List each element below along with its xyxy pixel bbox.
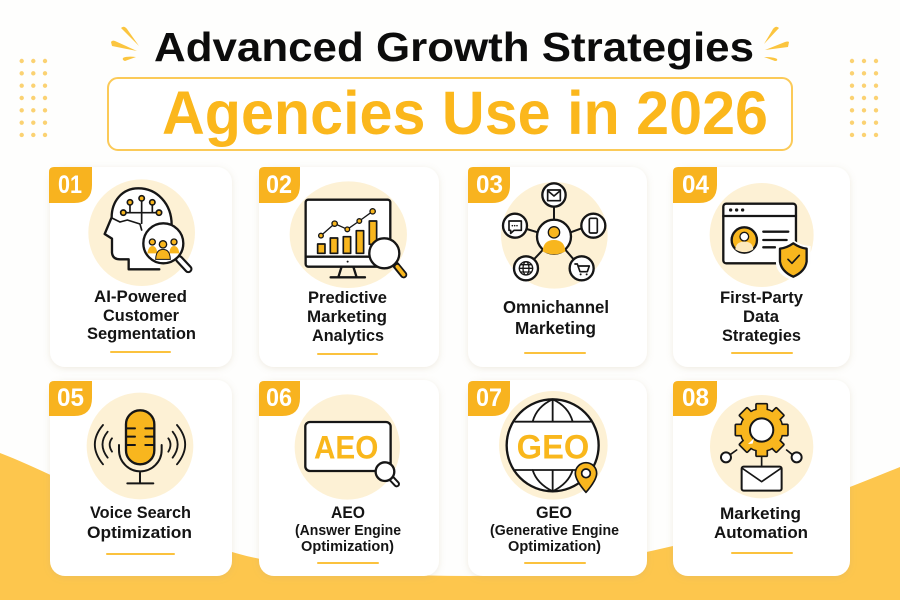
label: (Generative Engine — [490, 523, 619, 539]
label: Segmentation — [87, 325, 196, 343]
icon: analytics monitor — [290, 181, 407, 288]
icon: AI head with magnifier — [88, 179, 195, 286]
panel: 01 AI-Powered Customer Segmentation — [49, 167, 232, 367]
label: Voice Search — [90, 504, 191, 522]
label: (Answer Engine — [295, 523, 401, 539]
label: AI-Powered — [94, 288, 187, 306]
label — [87, 288, 196, 343]
label — [490, 504, 619, 555]
badge 08 — [673, 381, 717, 416]
title box — [108, 78, 792, 150]
label: Marketing — [720, 505, 801, 523]
icon: microphone — [87, 393, 193, 499]
icon: GEO globe with pin — [499, 391, 608, 500]
icon: gear and envelope — [710, 395, 813, 498]
badge 05: 05 — [57, 384, 84, 412]
label — [307, 289, 387, 345]
panel: 06 AEO Answer Engine Optimization — [259, 380, 439, 576]
panel: 02 Predictive Marketing Analytics — [259, 167, 439, 367]
sparkle left — [111, 27, 139, 61]
label: Optimization) — [301, 539, 394, 555]
panel: 08 Marketing Automation — [673, 380, 850, 576]
icon: browser profile with shield — [710, 183, 814, 287]
badge 02 — [259, 167, 300, 203]
sparkle right — [764, 27, 789, 61]
label: Predictive — [308, 289, 387, 307]
label: Optimization) — [508, 539, 601, 555]
badge 06 — [259, 381, 300, 416]
label: Automation — [714, 524, 808, 542]
icon: AEO search box: AEO — [314, 429, 378, 465]
label: First-Party — [720, 289, 804, 307]
badge 04: 04 — [682, 171, 709, 199]
badge 02: 02 — [266, 171, 292, 199]
decorative dots left — [22, 61, 45, 137]
icon: omnichannel hub — [501, 182, 608, 289]
badge 04 — [673, 167, 717, 203]
label — [503, 297, 609, 338]
label: Marketing — [307, 308, 387, 326]
badge 03 — [468, 167, 510, 203]
icon: AEO search box — [295, 394, 400, 500]
label: Strategies — [722, 327, 801, 345]
panel: 05 Voice Search Optimization — [49, 380, 232, 576]
panel: 04 First-Party Data Strategies — [673, 167, 850, 367]
badge 05 — [49, 381, 92, 416]
panel: 07 GEO Generative Engine Optimization — [468, 380, 647, 576]
label: Optimization — [87, 524, 192, 542]
badge 07 — [468, 381, 510, 416]
label: AEO — [331, 504, 365, 522]
label — [87, 504, 192, 542]
badge 01 — [49, 167, 92, 203]
icon: GEO globe with pin: GEO — [517, 428, 589, 466]
label — [720, 289, 804, 345]
badge 07: 07 — [476, 384, 502, 412]
label: Analytics — [312, 327, 384, 345]
badge 08: 08 — [682, 384, 709, 412]
title line two: Agencies Use in 2026 — [162, 79, 768, 147]
label: GEO — [536, 504, 572, 522]
panel: 03 Omnichannel Marketing — [468, 167, 647, 367]
badge 06: 06 — [266, 384, 292, 412]
background yellow wave — [0, 453, 900, 600]
decorative dots right — [852, 61, 876, 137]
label: Data — [743, 308, 780, 326]
label: Marketing — [515, 318, 596, 338]
label — [295, 504, 401, 555]
title line one: Advanced Growth Strategies — [154, 24, 754, 70]
badge 03: 03 — [476, 171, 503, 199]
badge 01: 01 — [58, 171, 82, 199]
label: Omnichannel — [503, 297, 609, 317]
label — [714, 505, 808, 542]
label: Customer — [103, 307, 180, 325]
